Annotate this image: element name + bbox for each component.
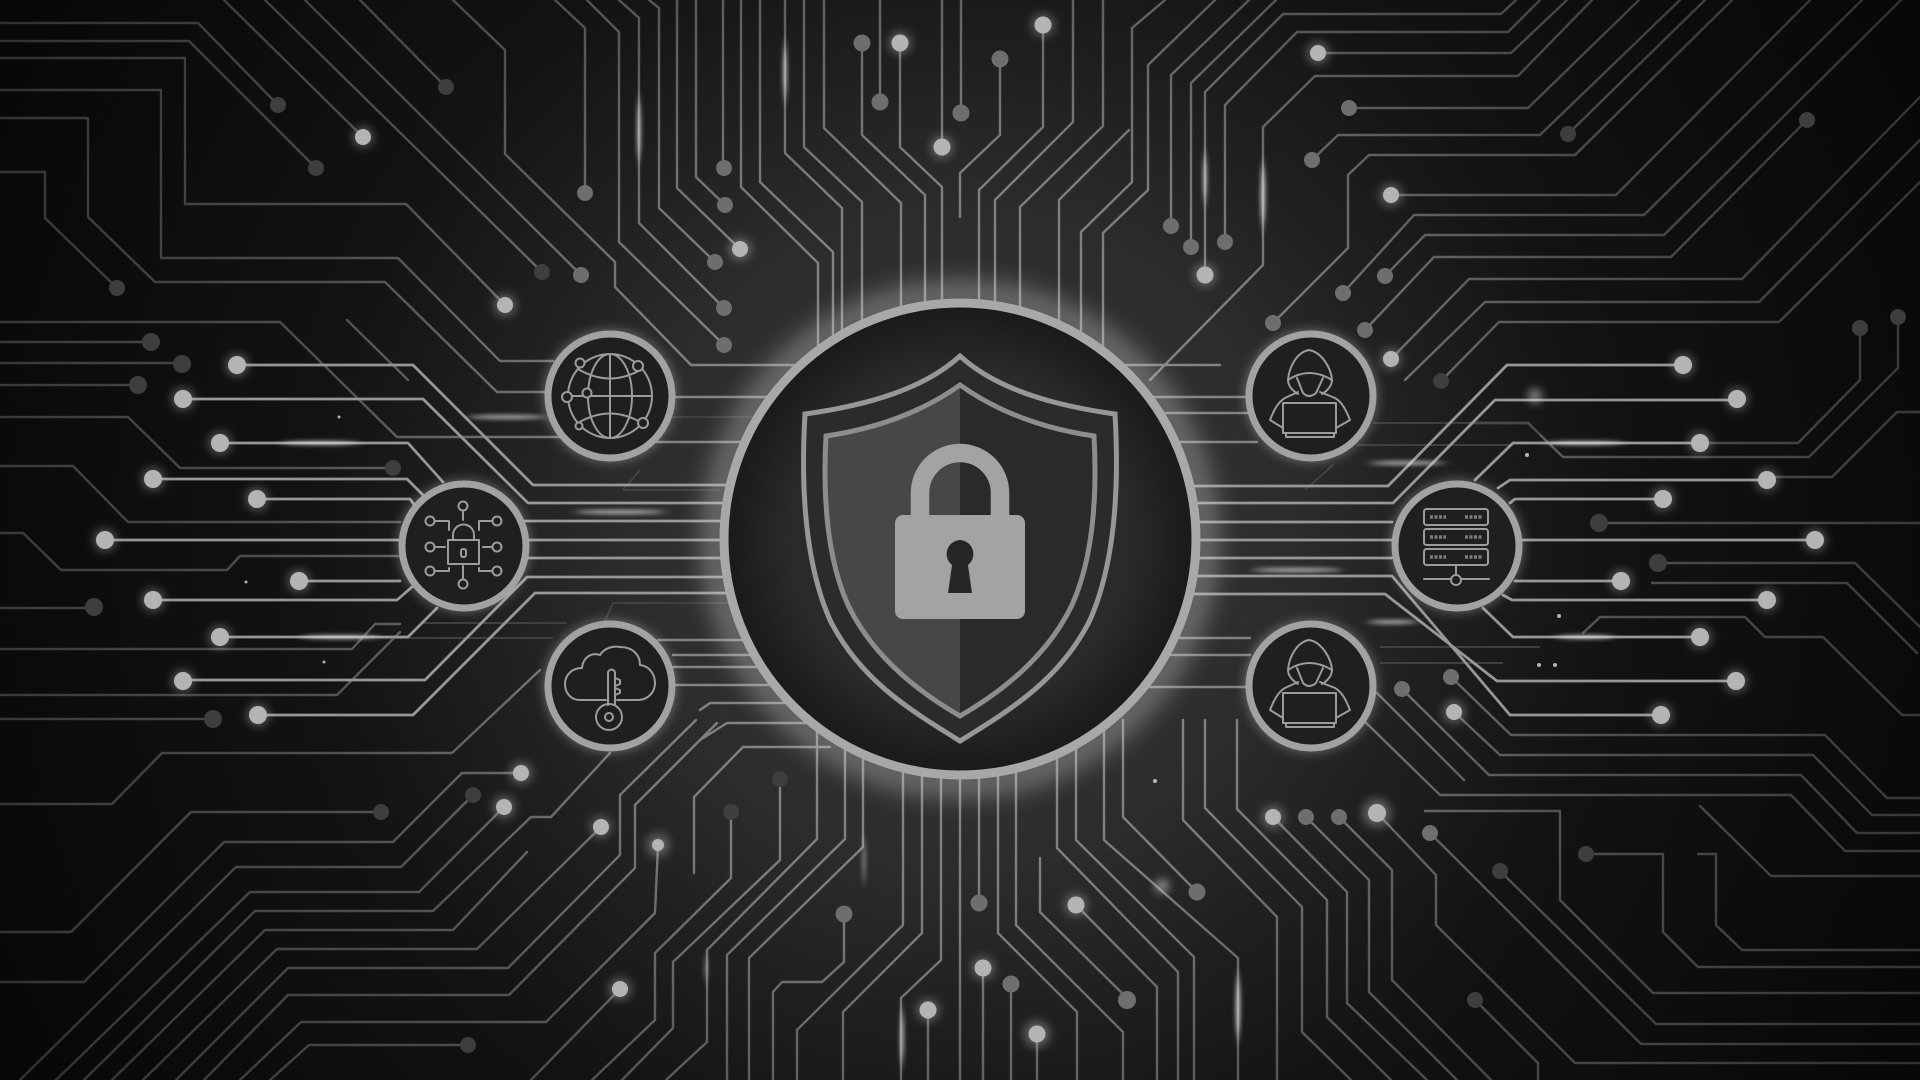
connector lines into the central badge: [657, 365, 1257, 740]
keyhole: [947, 540, 973, 593]
circuit traces: bottom right quadrant: [1057, 677, 1920, 1080]
shield inner left half: [825, 385, 960, 716]
circuit traces: top right quadrant: [1150, 0, 1920, 715]
icon: padlock network: [402, 484, 526, 608]
badge disc and ring: [724, 303, 1196, 775]
central badge: [716, 295, 1204, 783]
shield outer outline: [804, 356, 1116, 741]
shield inner right half: [960, 385, 1095, 716]
mid-brightness terminal pins: [573, 34, 1459, 1009]
bright right connector lines: [1160, 365, 1815, 715]
icon: cloud key: [548, 624, 672, 748]
padlock: [895, 453, 1025, 619]
padlock body: [895, 515, 1025, 619]
faint secondary traces near the centre: [380, 417, 1540, 663]
padlock shackle: [920, 453, 1000, 518]
bright left connector lines: [105, 365, 760, 715]
shield inner outline: [825, 385, 1095, 716]
icon: hooded figure with laptop (lower): [1249, 624, 1373, 748]
circuit traces: top left quadrant: [0, 0, 820, 719]
badge outer glow: [716, 295, 1204, 783]
icon: server rack: [1395, 484, 1519, 608]
circuit traces: top centre bundle: [741, 0, 1215, 350]
icon: hooded figure with laptop (upper): [1249, 334, 1373, 458]
circuit traces: bottom left quadrant: [0, 670, 830, 1080]
circuit traces: bottom centre bundle: [727, 740, 1157, 1080]
light streaks and sparkles: [244, 44, 1625, 1065]
shield: [804, 356, 1116, 741]
icon: globe network: [548, 334, 672, 458]
